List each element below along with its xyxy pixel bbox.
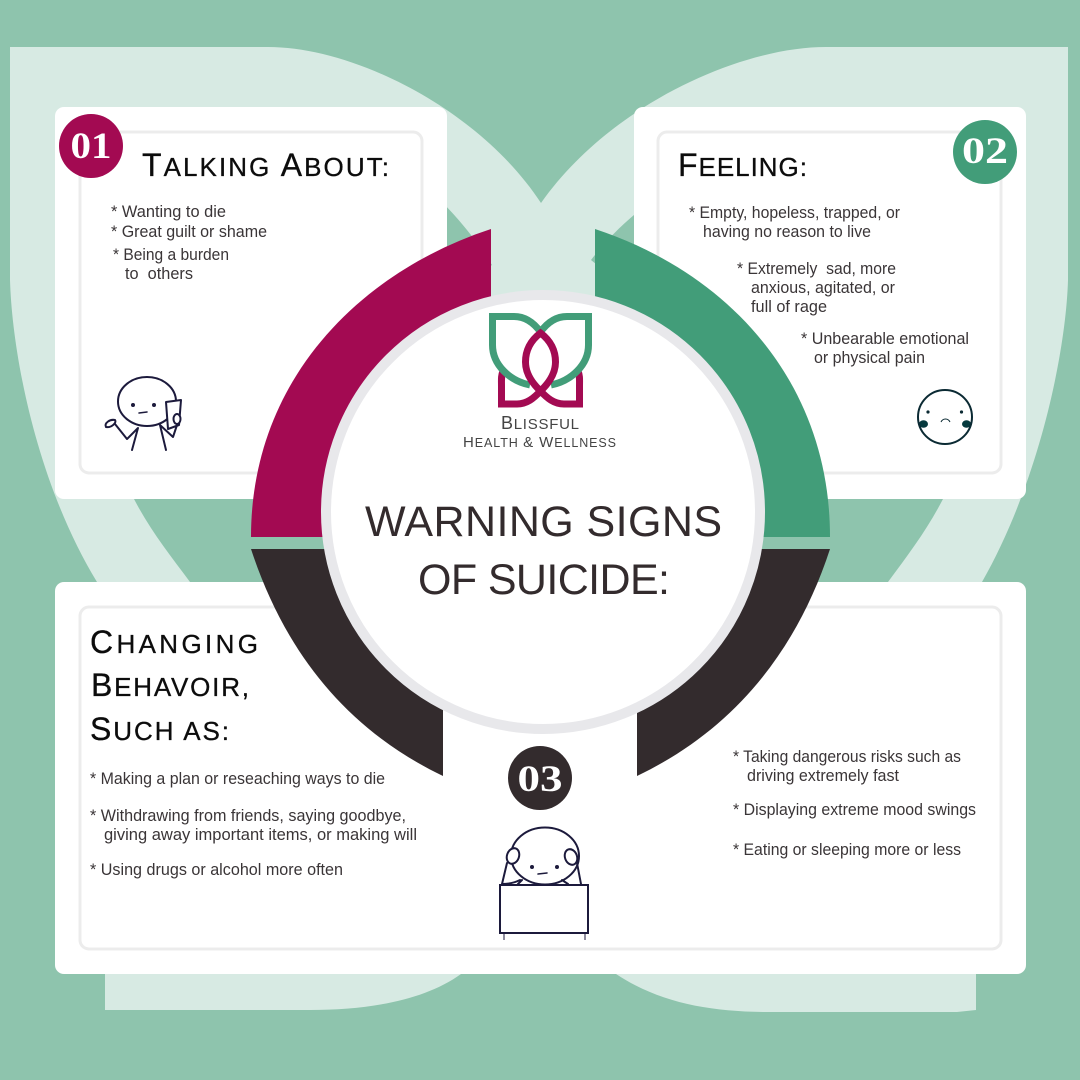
logo tagline: HEALTH & WELLNESS [463, 434, 616, 451]
heading: changing behavior [90, 624, 258, 747]
panel: changing behavior [55, 582, 1026, 974]
inner border [80, 607, 1001, 949]
icon: person on phone [106, 377, 181, 450]
badge 02: 02 [962, 131, 1008, 172]
inner wing shadow left [120, 470, 330, 582]
list: behavior right: * Eating or sleeping more or less [733, 841, 961, 859]
card background [634, 107, 1026, 499]
list: behavior left: * Making a plan or reseaching ways to die [90, 770, 385, 788]
ring: green arc [595, 229, 830, 537]
badge 03: 03 [518, 759, 562, 800]
inner wing tip left [440, 200, 492, 300]
inner wing tip right [591, 210, 640, 300]
list: behavior right: * Displaying extreme mood swings [733, 801, 976, 819]
icon: person at desk [500, 828, 588, 940]
list: behavior left: * Withdrawing from friends, saying goodbye, [90, 807, 406, 825]
ring: crimson arc [251, 229, 491, 537]
list: talking about: * Being a burden [113, 246, 229, 264]
badge 01 [59, 114, 123, 178]
list: behavior right: * Taking dangerous risks such as [733, 748, 961, 766]
center circle [326, 295, 760, 729]
inner wing shadow right [760, 470, 955, 582]
list: talking about: to others [125, 265, 193, 283]
logo [463, 316, 616, 451]
list: behavior right [733, 748, 976, 859]
list: talking about: * Wanting to die [111, 203, 226, 221]
card background [55, 107, 447, 499]
butterfly wing lower right [605, 960, 976, 1012]
ring: dark arc right [637, 549, 830, 776]
list: behavior left: giving away important items, or making will [104, 826, 417, 844]
ring: dark arc left [251, 549, 443, 776]
list: talking about [111, 203, 267, 283]
list: feeling: or physical pain [814, 349, 925, 367]
panel: talking about [55, 107, 447, 499]
list: feeling: * Empty, hopeless, trapped, or [689, 204, 900, 222]
list: feeling: anxious, agitated, or [751, 279, 895, 297]
badge 03 [508, 746, 572, 810]
heading: changing behavior: BEHAVOIR, [91, 667, 249, 703]
butterfly wings upper [10, 47, 1068, 582]
card background [55, 582, 1026, 974]
badge 02 [953, 120, 1017, 184]
icon: sad face [918, 390, 972, 444]
list: feeling: * Unbearable emotional [801, 330, 969, 348]
inner border [80, 132, 422, 473]
list: feeling: having no reason to live [703, 223, 871, 241]
list: behavior left: * Using drugs or alcohol more often [90, 861, 343, 879]
logo mark [492, 316, 588, 404]
list: feeling: * Extremely sad, more [737, 260, 896, 278]
title: WARNING SIGNS [365, 498, 722, 546]
title [365, 498, 722, 604]
title: OF SUICIDE: [418, 556, 670, 604]
list: feeling [689, 204, 969, 367]
butterfly wing lower left [105, 960, 475, 1010]
heading: changing behavior: CHANGING [90, 624, 258, 660]
panel: feeling [634, 107, 1026, 499]
heading: feeling: FEELING: [678, 147, 807, 183]
heading: talking about: TALKING ABOUT: [142, 147, 389, 183]
list: behavior left [90, 770, 417, 879]
list: behavior right: driving extremely fast [747, 767, 899, 785]
heading: changing behavior: SUCH AS: [90, 711, 229, 747]
inner border [658, 132, 1001, 473]
list: feeling: full of rage [751, 298, 827, 316]
list: talking about: * Great guilt or shame [111, 223, 267, 241]
badge 01: 01 [70, 126, 112, 167]
logo name: BLISSFUL [501, 413, 579, 433]
